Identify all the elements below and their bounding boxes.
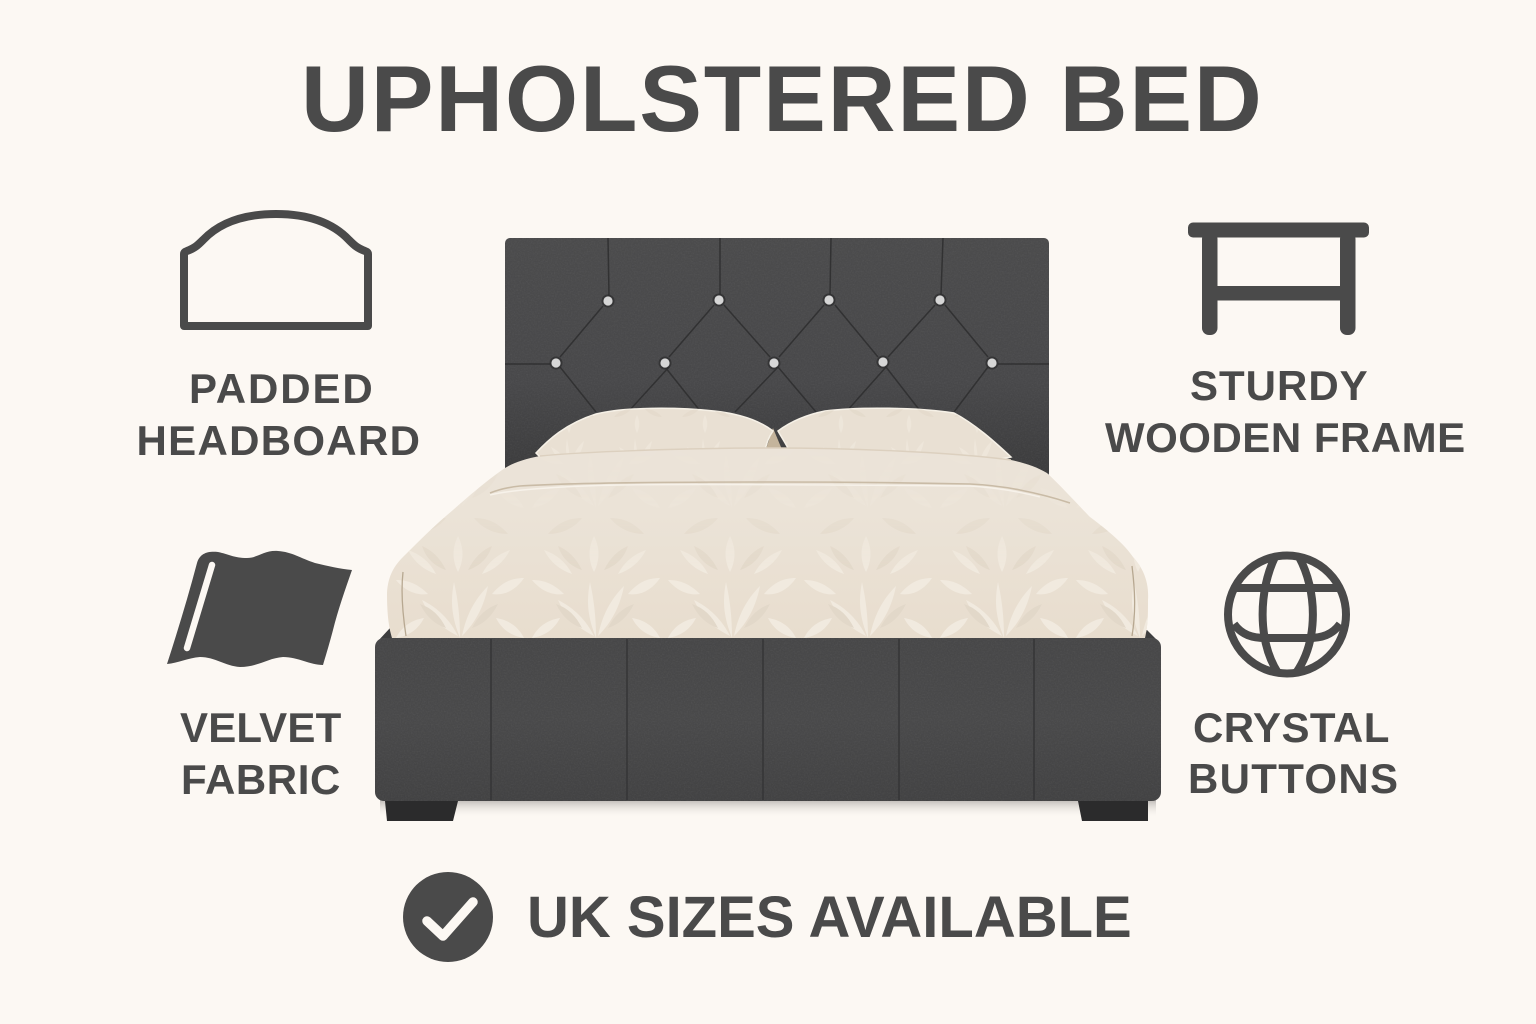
floor shadow <box>380 800 1156 818</box>
label: sturdy wooden frame: WOODEN FRAME <box>1105 414 1466 461</box>
icon: headboard <box>184 214 368 326</box>
label: velvet fabric: VELVET <box>180 704 341 751</box>
bed base back corners <box>378 628 1158 641</box>
label: crystal buttons <box>1188 704 1399 802</box>
pillow gap <box>765 428 783 452</box>
label: velvet fabric <box>180 704 341 803</box>
pillow texture <box>536 408 1011 460</box>
label: crystal buttons: CRYSTAL <box>1193 704 1390 751</box>
icon: check badge <box>403 872 493 962</box>
icon: fabric <box>167 551 352 667</box>
label: padded headboard <box>136 365 421 464</box>
legs <box>385 801 1148 821</box>
pillows <box>536 408 1011 460</box>
label: velvet fabric: FABRIC <box>181 756 341 803</box>
label: sturdy wooden frame <box>1105 362 1466 461</box>
label: sturdy wooden frame: STURDY <box>1190 362 1369 409</box>
duvet <box>387 448 1148 638</box>
icon: crystal globe <box>1228 556 1346 674</box>
label: padded headboard: PADDED <box>189 365 375 412</box>
crystal buttons <box>550 294 998 370</box>
label: UK sizes available: UK SIZES AVAILABLE <box>527 885 1132 950</box>
icon: wooden frame <box>1188 222 1369 335</box>
title: UPHOLSTERED BED <box>301 46 1264 151</box>
headboard <box>505 238 1049 478</box>
bed illustration <box>375 238 1161 821</box>
label: padded headboard: HEADBOARD <box>136 417 421 464</box>
bed base <box>375 638 1161 801</box>
label: crystal buttons: BUTTONS <box>1188 755 1399 802</box>
